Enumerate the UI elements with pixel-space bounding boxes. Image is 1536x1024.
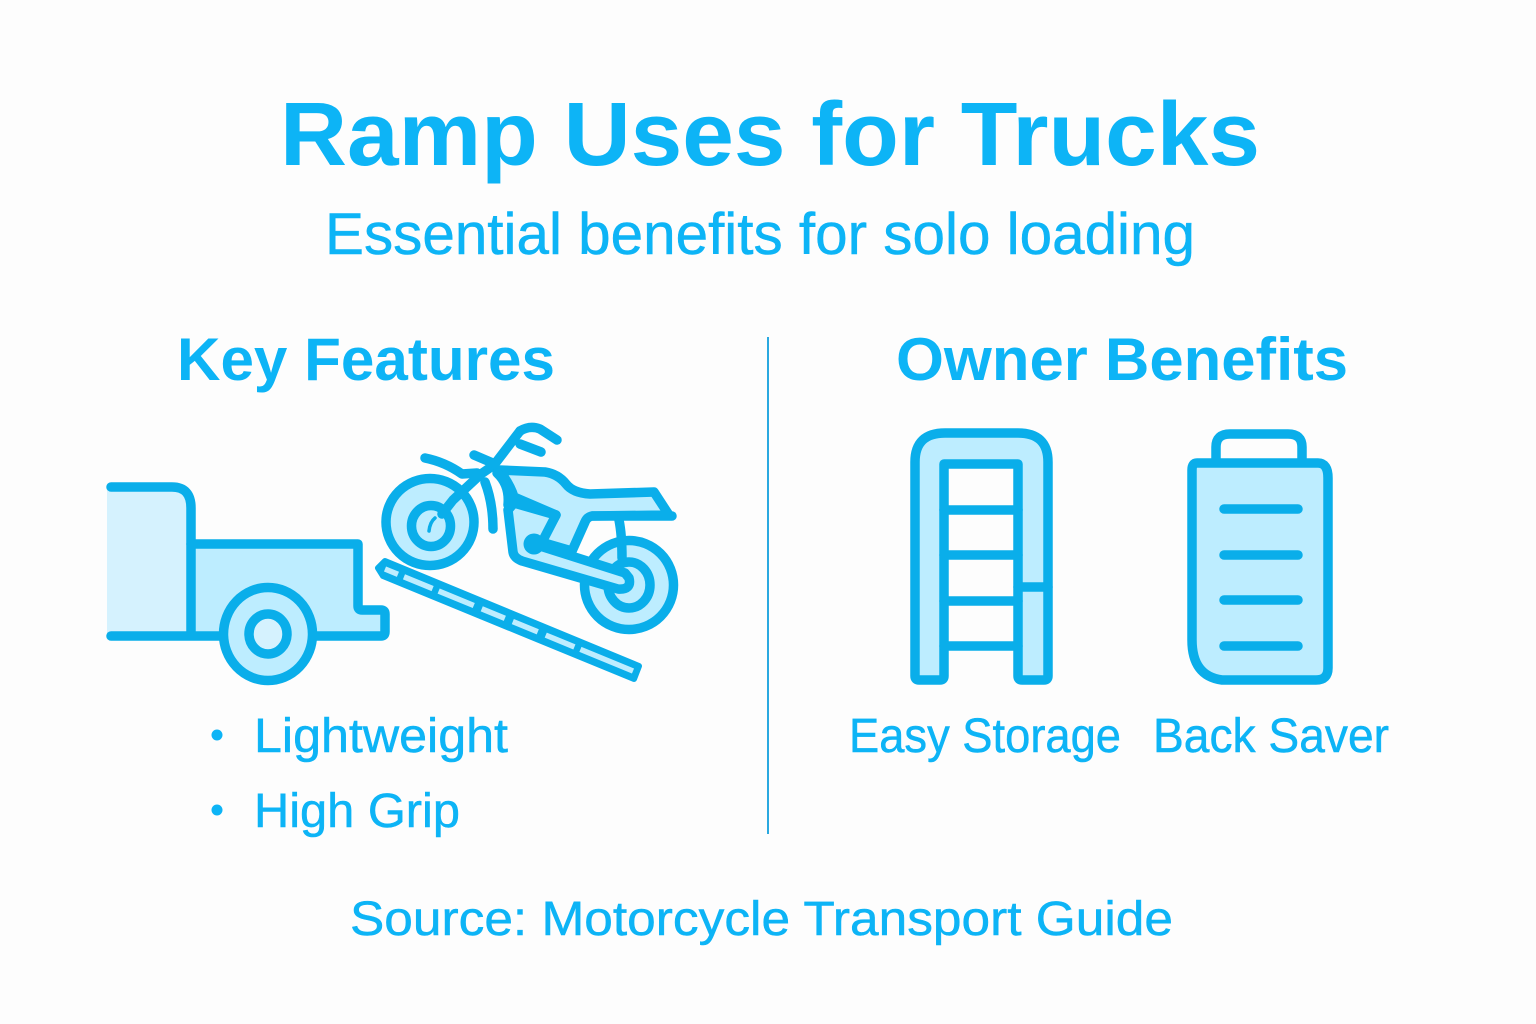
source: Source: Motorcycle Transport Guide [350,893,1173,946]
subtitle: Essential benefits for solo loading [325,202,1195,267]
label lightweight: Lightweight [254,710,508,763]
title: Ramp Uses for Trucks [280,85,1260,185]
heading: owner benefits: Owner Benefits [896,326,1348,393]
icon: motorcycle [386,427,674,630]
bullet high grip [212,804,222,816]
heading: key features: Key Features [177,326,555,393]
icon: pickup truck [107,487,385,680]
icon: ramp [378,561,639,679]
label: easy storage: Easy Storage [849,710,1121,763]
label: back saver: Back Saver [1153,710,1389,763]
handlebars and fork [425,427,557,529]
bullet lightweight [212,730,222,740]
rear wheel [584,540,674,630]
bullet list: features [212,710,508,838]
icon: folded ramp (easy storage) [915,433,1048,680]
label high grip: High Grip [254,785,460,838]
truck wheel [224,588,312,680]
icon: back support (back saver) [1192,434,1328,680]
front wheel [386,478,474,566]
motorcycle frame and seat [499,470,669,551]
